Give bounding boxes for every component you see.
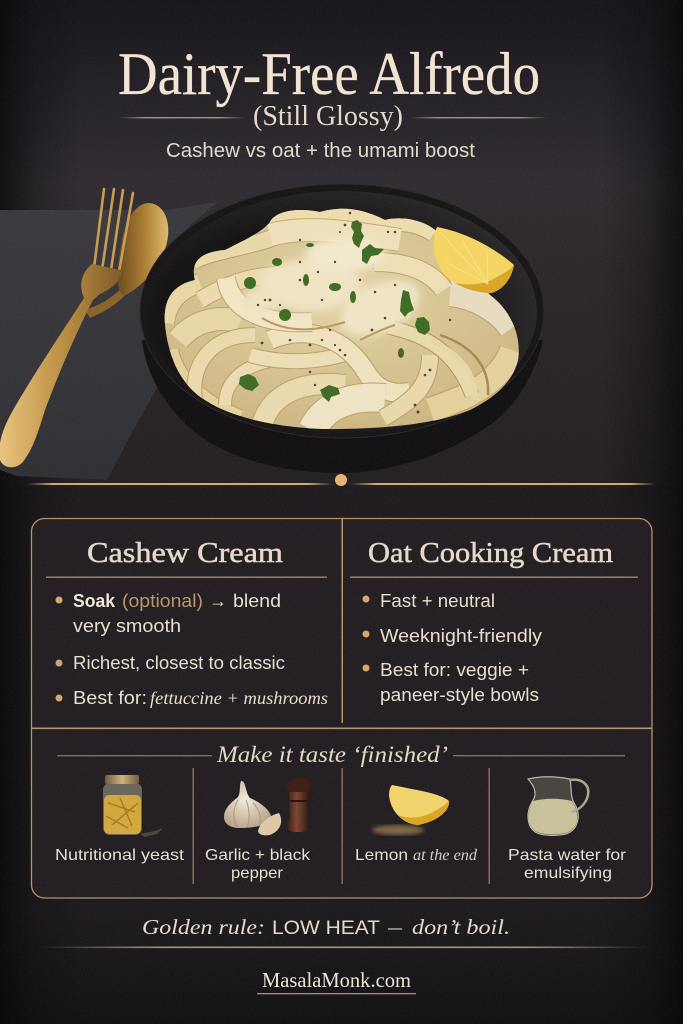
- cashew bullet 1: (optional): [122, 591, 203, 611]
- oat bullet 3: paneer-style bowls: [380, 685, 539, 705]
- item: garlic and black pepper: [205, 778, 311, 882]
- oat bullet 2: Weeknight-friendly: [380, 626, 542, 646]
- cashew heading: Cashew Cream: [87, 538, 283, 569]
- oat bullet 3: Best for: veggie +: [380, 660, 529, 680]
- cashew bullet 3: Best for:: [73, 688, 147, 708]
- item: lemon at the end: at the end: [413, 847, 478, 864]
- oat bullet 1: Fast + neutral: [380, 591, 495, 611]
- bowl rim: [140, 184, 544, 438]
- item: lemon at the end: [355, 785, 478, 864]
- golden rule: [142, 915, 510, 939]
- golden rule: don’t boil.: [412, 915, 510, 939]
- subtitle with flanking rules: (Still Glossy): [253, 100, 403, 132]
- item: lemon at the end: Lemon: [355, 847, 408, 864]
- icon: garlic bulb: [224, 781, 281, 835]
- tagline: Cashew vs oat + the umami boost: [166, 140, 475, 162]
- cashew bullet 1: blend: [233, 591, 281, 611]
- column: oat cooking cream: [350, 538, 638, 705]
- oat heading: Oat Cooking Cream: [368, 538, 613, 569]
- cashew bullet 2: Richest, closest to classic: [73, 653, 285, 673]
- item: nutritional yeast: Nutritional yeast: [55, 847, 185, 864]
- finish section heading: Make it taste ‘finished’: [216, 742, 448, 767]
- photo: napkin, cutlery and bowl of pasta: [0, 184, 544, 480]
- cashew bullet 1: Soak: [73, 591, 116, 611]
- section divider with dot: [28, 474, 655, 486]
- cashew bullet 3: [56, 688, 328, 708]
- icon: pepper mill: [286, 778, 311, 832]
- cashew bullet 3: fettuccine + mushrooms: [150, 688, 328, 708]
- item: garlic and black pepper: pepper: [231, 865, 284, 882]
- golden rule: —: [387, 915, 403, 939]
- title: Dairy-Free Alfredo: [118, 41, 540, 107]
- cashew bullet 1: [56, 591, 281, 636]
- icon: lemon wedge with zest: [372, 785, 449, 835]
- item: nutritional yeast: [55, 775, 185, 864]
- comparison panel: [32, 518, 652, 898]
- lemon wedge: [434, 227, 514, 293]
- oat bullet 3: [362, 660, 539, 705]
- item: garlic and black pepper: Garlic + black: [205, 847, 311, 864]
- spoon: [85, 203, 168, 318]
- icon: glass jug: [528, 777, 588, 835]
- website credit: MasalaMonk.com: [262, 968, 411, 992]
- napkin: [0, 202, 218, 480]
- pasta: [160, 200, 525, 435]
- fork: [0, 189, 133, 467]
- item: pasta water: [508, 777, 627, 882]
- item: pasta water: emulsifying: [524, 865, 612, 882]
- parsley and pepper: [239, 220, 430, 402]
- column: cashew cream: [46, 538, 328, 708]
- item: pasta water: Pasta water for: [508, 847, 627, 864]
- cashew bullet 1: very smooth: [73, 616, 181, 636]
- golden rule: Golden rule:: [142, 915, 265, 939]
- golden rule: LOW HEAT: [272, 918, 380, 939]
- bowl body: [142, 340, 543, 473]
- cashew bullet 1: →: [209, 591, 227, 611]
- icon: yeast jar: [103, 775, 163, 837]
